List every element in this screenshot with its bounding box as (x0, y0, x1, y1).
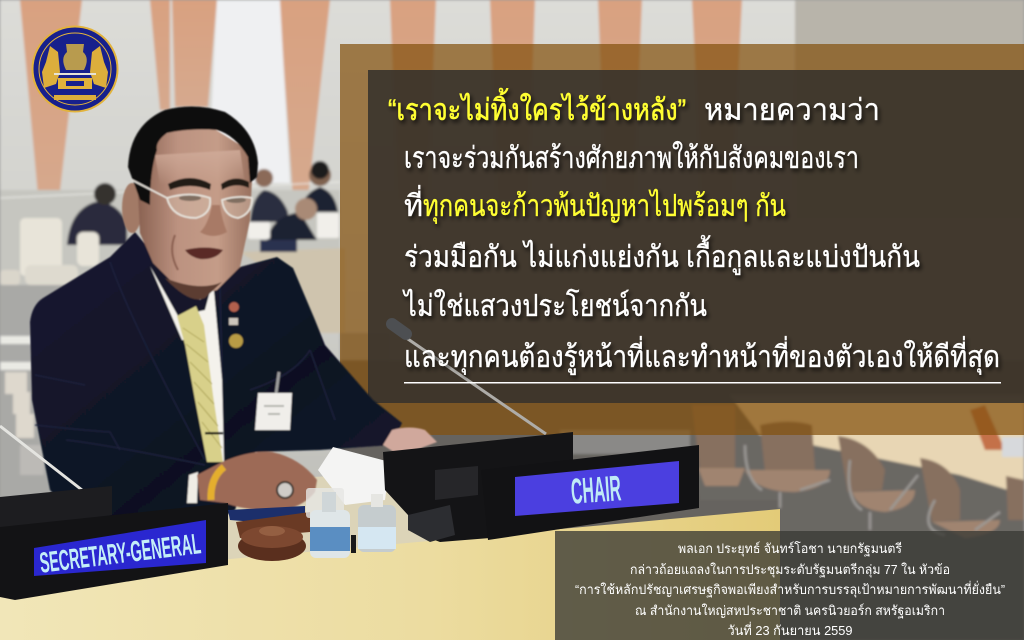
black hair (128, 106, 258, 205)
desk (0, 509, 780, 640)
ear (122, 183, 142, 233)
glasses (132, 180, 252, 218)
background: white curtain (208, 0, 290, 183)
background: left floor (0, 285, 65, 505)
quote line 3: ทุกคนจะก้าวพ้นปัญหาไปพร้อมๆ กัน (423, 188, 786, 225)
small left microphone (0, 426, 82, 490)
caption line 3: “การใช้หลักปรัชญาเศรษฐกิจพอเพียงสำหรับการบรรลุเป้าหมายการพัฒนาที่ยั่งยืน” (575, 581, 1005, 598)
ring (277, 482, 293, 498)
background: right grey wall (795, 0, 1024, 220)
background: white chairs (0, 213, 339, 285)
eyes (179, 195, 246, 203)
monitor: centre (383, 432, 573, 542)
quote line 2: เราจะร่วมกันสร้างศักยภาพให้กับสังคมของเรา (404, 141, 859, 175)
emblem: bowl (63, 44, 87, 70)
quote line 4: ร่วมมือกัน ไม่แก่งแย่งกัน เกื้อกูลและแบ่งปันกัน (404, 235, 920, 275)
nameplate: secretary-general (0, 503, 228, 600)
person: speaker (30, 106, 437, 530)
nameplate: chair (481, 445, 699, 540)
quote line 1: “เราจะไม่ทิ้งใครไว้ข้างหลัง” (388, 88, 686, 127)
caption text (575, 541, 1005, 638)
background: delegate table (240, 248, 345, 333)
suit jacket (30, 232, 402, 530)
white shirt (150, 266, 224, 462)
mouth (185, 248, 223, 259)
background: brown chairs (692, 405, 1024, 522)
background: laptop (970, 405, 1005, 450)
face and neck (138, 120, 252, 295)
yellow tie (177, 306, 223, 462)
water bottles (306, 488, 396, 558)
quote line 3 (404, 185, 786, 225)
panel: orange translucent backing (340, 44, 1024, 435)
background: right floor (340, 360, 1024, 640)
nameplate: chair: CHAIR (570, 467, 622, 512)
lapel pins (229, 302, 243, 348)
nose (200, 205, 227, 236)
eyebrows (168, 178, 249, 190)
background: orange wall wedges (20, 0, 742, 217)
neck shadow (165, 278, 222, 299)
emblem: guardians (42, 46, 108, 88)
caption line 5: วันที่ 23 กันยายน 2559 (728, 622, 852, 638)
hand (197, 452, 317, 510)
panel: dark quote background (368, 70, 1024, 403)
caption line 2: กล่าวถ้อยแถลงในการประชุมระดับรัฐมนตรีกลุ่ม 77 ใน หัวข้อ (630, 562, 950, 578)
panel: caption background (555, 531, 1024, 640)
right hand (383, 428, 437, 456)
quote line 1 (388, 88, 880, 127)
background: left fog band (0, 190, 340, 290)
paper sheet (318, 447, 390, 505)
quote text (388, 88, 1000, 376)
background: seated delegates (67, 161, 338, 245)
gavel block (236, 512, 310, 561)
suit folds (35, 262, 335, 465)
emblem: base band (54, 95, 96, 100)
caption line 1: พลเอก ประยุทธ์ จันทร์โอชา นายกรัฐมนตรี (678, 541, 902, 557)
folder on desk (228, 506, 305, 526)
background: cream table (730, 395, 1024, 495)
quote line 1: หมายความว่า (704, 94, 880, 127)
desk back area (228, 470, 500, 570)
quote line 3: ที่ (404, 185, 423, 223)
nameplate: secretary-general: SECRETARY-GENERAL (38, 528, 203, 580)
microphone: speaker (392, 324, 546, 434)
lanyard badge (255, 372, 292, 430)
shirt cuff (187, 472, 198, 503)
caption line 4: ณ สำนักงานใหญ่สหประชาชาติ นครนิวยอร์ก สหรัฐอเมริกา (635, 603, 945, 619)
yellow wristband (211, 467, 224, 500)
monitor: left (0, 486, 112, 535)
quote line 5: ไม่ใช่แสวงประโยชน์จากกัน (402, 288, 707, 323)
emblem: government seal (32, 26, 118, 112)
